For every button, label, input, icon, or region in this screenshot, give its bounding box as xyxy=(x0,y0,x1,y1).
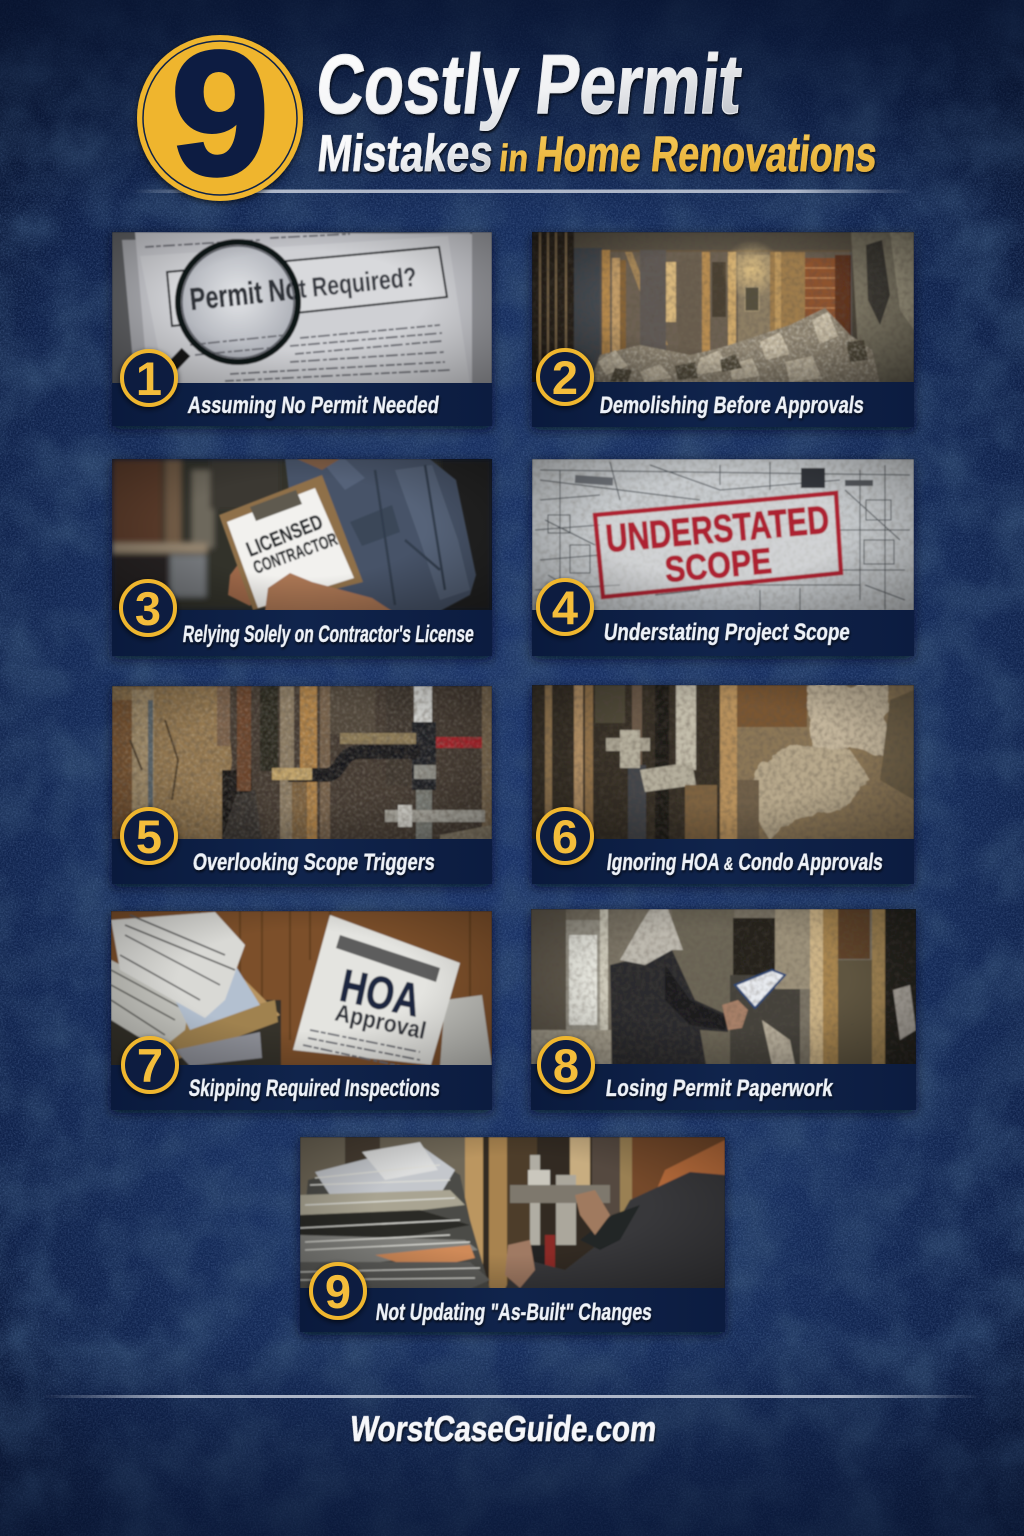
badge 3 xyxy=(121,581,175,635)
caption bar xyxy=(300,1288,725,1332)
photo: demolished room with rubble xyxy=(532,232,914,383)
footer divider xyxy=(42,1395,982,1398)
caption bar xyxy=(531,1064,916,1110)
panel: mistake 2 xyxy=(532,232,914,427)
badge 8: 8 xyxy=(553,1039,579,1092)
badge 7 xyxy=(123,1038,177,1092)
photo: permit document under magnifying glass xyxy=(112,232,492,392)
icon: gold number 9 coin: 9 xyxy=(171,16,269,212)
caption: Skipping Required Inspections xyxy=(187,1075,442,1102)
badge 1 xyxy=(122,351,176,405)
photo: pipes and peeling plaster xyxy=(532,685,914,840)
caption bar xyxy=(111,1065,492,1110)
caption: Not Updating "As-Built" Changes xyxy=(374,1299,654,1326)
caption: Ignoring HOA & Condo Approvals xyxy=(605,849,885,876)
badge 9 xyxy=(311,1264,365,1318)
panel: mistake 4 xyxy=(532,459,914,656)
badge 8 xyxy=(539,1038,593,1092)
badge 1: 1 xyxy=(136,352,162,405)
badge 4 xyxy=(538,580,592,634)
caption: Demolishing Before Approvals xyxy=(598,392,866,419)
title: Mistakes xyxy=(315,125,496,183)
title: in xyxy=(497,138,530,180)
photo: blueprint with understated scope stamp: UNDERSTATED xyxy=(604,499,831,561)
caption: Relying Solely on Contractor's License xyxy=(181,621,476,648)
badge 9: 9 xyxy=(325,1265,351,1318)
photo: permit document under magnifying glass: Permit No xyxy=(188,271,301,317)
caption: Losing Permit Paperwork xyxy=(604,1075,835,1102)
badge 5: 5 xyxy=(136,810,162,863)
panel: mistake 9 xyxy=(300,1137,725,1332)
panel: mistake 5 xyxy=(112,686,492,884)
panel: mistake 6 xyxy=(532,685,914,884)
photo: man holding licensed contractor clipboard: CONTRACTOR xyxy=(251,529,340,578)
panel: mistake 8 xyxy=(531,909,916,1110)
caption: Understating Project Scope xyxy=(602,619,852,646)
caption bar xyxy=(112,610,492,656)
caption: Overlooking Scope Triggers xyxy=(191,849,437,876)
panel: mistake 3 xyxy=(112,459,492,656)
caption bar xyxy=(532,610,914,656)
badge 2 xyxy=(538,350,592,404)
caption bar xyxy=(112,839,492,884)
photo: paper stack and HOA approval sheet: HOA xyxy=(336,959,425,1026)
photo: blueprint with understated scope stamp xyxy=(532,459,914,611)
header divider xyxy=(132,190,912,193)
photo: exposed plumbing behind wall xyxy=(112,686,492,840)
caption bar xyxy=(532,839,914,884)
badge 7: 7 xyxy=(137,1039,163,1092)
caption bar xyxy=(532,382,914,427)
panel: mistake 1 xyxy=(112,232,492,426)
badge 6 xyxy=(538,809,592,863)
photo: man holding licensed contractor clipboard: LICENSED xyxy=(243,510,326,562)
photo: permit document under magnifying glass: t Required? xyxy=(297,262,418,304)
photo: paper stack and HOA approval sheet xyxy=(111,911,492,1066)
icon: gold number 9 coin xyxy=(137,16,303,212)
photo: blueprint with understated scope stamp: SCOPE xyxy=(663,540,773,590)
panel: mistake 7 xyxy=(111,911,492,1110)
footer website: WorstCaseGuide.com xyxy=(348,1408,659,1449)
title: Home Renovations xyxy=(534,126,880,182)
photo: paper stack and HOA approval sheet: Approval xyxy=(333,999,428,1045)
badge 5 xyxy=(122,809,176,863)
photo: paper pile and worker at pipes xyxy=(300,1137,725,1289)
badge 6: 6 xyxy=(552,810,578,863)
badge 2: 2 xyxy=(552,351,578,404)
photo: inspector with clipboard at torn-up wall xyxy=(531,909,916,1065)
title xyxy=(312,37,880,183)
caption bar xyxy=(112,383,492,426)
title: Costly Permit xyxy=(312,37,746,131)
caption: Assuming No Permit Needed xyxy=(186,392,441,419)
badge 3: 3 xyxy=(135,582,161,635)
photo: man holding licensed contractor clipboard xyxy=(112,459,492,611)
badge 4: 4 xyxy=(552,581,578,634)
